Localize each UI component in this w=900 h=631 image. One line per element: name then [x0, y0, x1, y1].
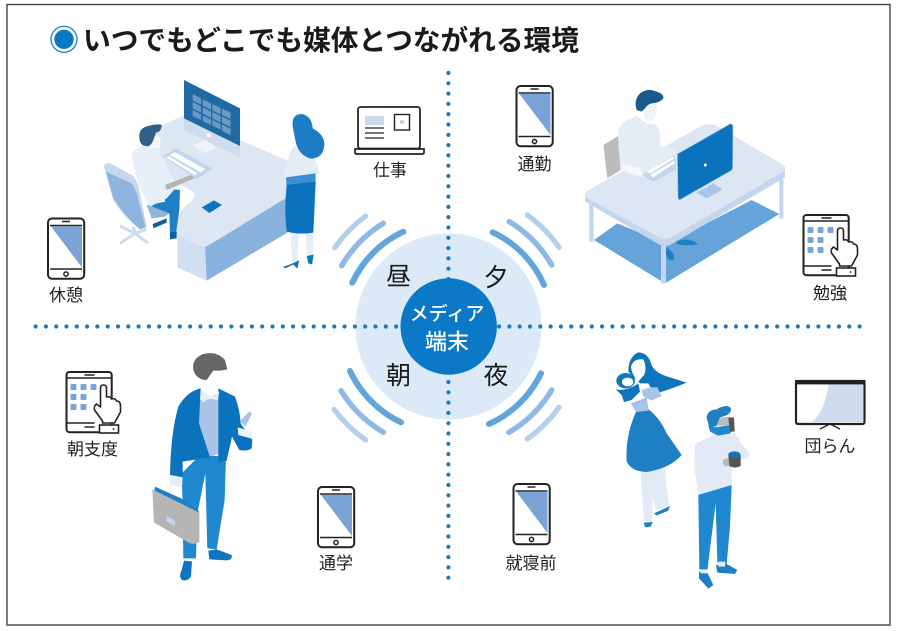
keyboard — [642, 155, 676, 182]
title: いつでもどこでも媒体とつながれる環境 — [83, 25, 579, 56]
icon: television — [795, 380, 866, 429]
caption: commute: 通勤 — [518, 155, 552, 174]
center hub — [400, 278, 497, 375]
title icon: bullet circle — [51, 26, 77, 52]
computer monitor — [677, 124, 733, 200]
center label: 端末 — [425, 330, 469, 354]
chair — [603, 136, 621, 178]
signal arcs: upper right — [493, 215, 559, 285]
keyboard — [163, 148, 212, 179]
phone on desk — [202, 200, 222, 213]
signal arcs: upper left — [335, 216, 403, 283]
time labels: 夜 — [483, 362, 509, 390]
briefcase — [152, 487, 199, 544]
shoes — [180, 549, 232, 581]
seated man — [618, 90, 677, 177]
desk — [133, 117, 287, 281]
trousers — [182, 455, 226, 558]
illustration: standing man with briefcase — [152, 353, 252, 581]
chair — [104, 163, 178, 243]
desk top — [584, 124, 785, 246]
man on phone — [694, 406, 749, 589]
inner media circle — [400, 278, 497, 375]
caption: before bed: 就寝前 — [506, 554, 556, 573]
dotted dividers — [36, 73, 864, 580]
icon: tablet (morning prep) — [66, 372, 120, 433]
icon: phone (school commute) — [318, 487, 354, 547]
icon: phone (commute) — [516, 86, 553, 146]
signal arcs: lower left — [334, 371, 401, 440]
woman with baby — [616, 352, 687, 527]
inner shirt — [197, 398, 221, 459]
caption: family time: 団らん — [804, 437, 856, 456]
head — [193, 353, 227, 392]
illustration: office desk with two workers — [104, 80, 324, 281]
illustration: man at desk with computer — [584, 90, 785, 283]
time labels — [386, 263, 509, 390]
caption: school commute: 通学 — [319, 554, 353, 573]
caption: study: 勉強 — [813, 284, 847, 303]
cuffs and phone — [169, 411, 252, 487]
icon: laptop (work) — [355, 107, 424, 154]
caption: work: 仕事 — [373, 161, 407, 180]
outer time-of-day circle — [356, 234, 542, 420]
floor shadow — [594, 200, 779, 283]
desk legs — [589, 177, 783, 283]
seated man — [132, 124, 194, 239]
time labels: 朝 — [386, 362, 411, 390]
collar — [201, 390, 219, 403]
time labels: 夕 — [483, 264, 509, 292]
feet under desk — [666, 240, 698, 260]
monitor — [184, 80, 240, 157]
standing woman — [283, 114, 324, 269]
signal arcs: lower right — [489, 373, 559, 439]
jacket — [170, 388, 252, 477]
caption: rest: 休憩 — [49, 286, 83, 305]
caption: morning prep: 朝支度 — [67, 440, 118, 459]
illustration: family with baby and man on phone — [616, 352, 749, 589]
center label — [410, 302, 484, 354]
icon: phone (before bed) — [514, 484, 550, 544]
time labels: 昼 — [386, 263, 411, 291]
icon: phone (rest) — [48, 218, 84, 279]
icon: tablet (study) — [804, 215, 858, 276]
center label: メディア — [410, 302, 484, 325]
